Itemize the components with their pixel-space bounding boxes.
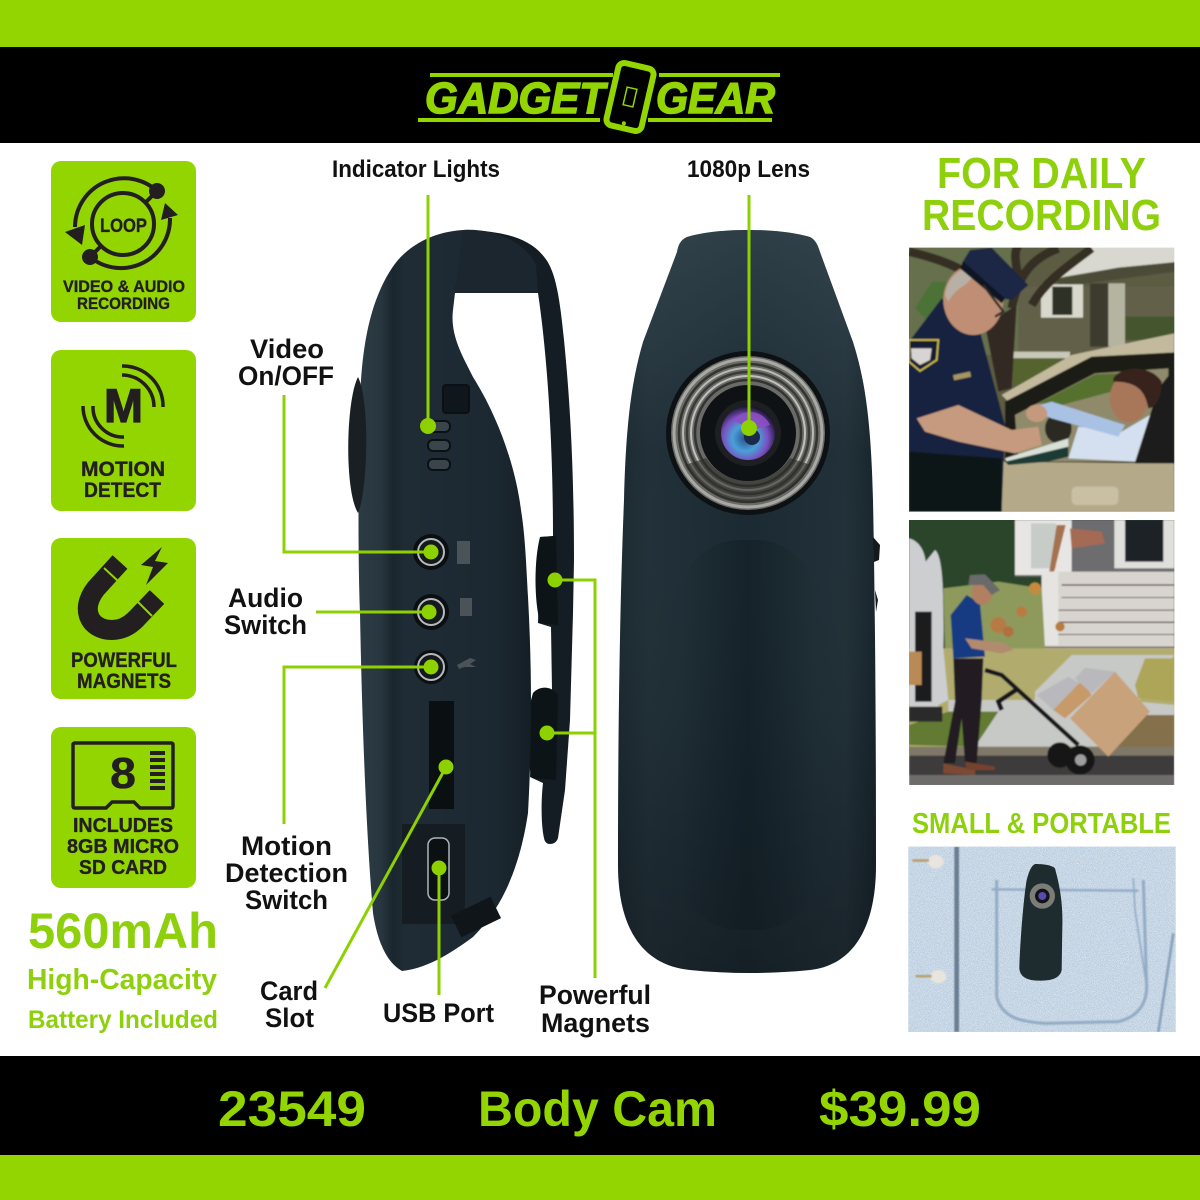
photo: delivery man with hand truck xyxy=(905,515,1180,786)
battery callout: High-Capacity xyxy=(27,964,217,996)
logo: Gadget Gear: GEAR xyxy=(656,74,775,123)
bottom green band xyxy=(0,1155,1200,1200)
panel: powerful magnets: POWERFUL xyxy=(71,649,177,672)
heading: for daily recording: RECORDING xyxy=(922,191,1161,240)
heading: small and portable: SMALL & PORTABLE xyxy=(912,808,1171,840)
logo: Gadget Gear: GADGET xyxy=(425,74,608,123)
callout: USB Port xyxy=(383,860,494,1028)
callout: Powerful Magnets xyxy=(539,572,651,1038)
switches xyxy=(413,534,449,684)
callout: Motion Detection Switch xyxy=(225,660,438,915)
panel: loop recording: VIDEO & AUDIO xyxy=(63,277,185,296)
callout: Video On/OFF: On/OFF xyxy=(238,361,334,391)
callout: Audio Switch: Switch xyxy=(224,610,307,640)
icon: horseshoe magnet xyxy=(88,547,168,630)
panel: 8GB micro SD card xyxy=(51,727,196,888)
indicator slots xyxy=(428,385,469,470)
photo: camera clipped on denim pocket xyxy=(905,843,1180,1037)
card slot xyxy=(429,701,454,809)
camera body xyxy=(358,230,531,971)
panel: loop recording: LOOP xyxy=(100,216,147,237)
icon: motion M with waves: M xyxy=(104,379,143,432)
callout: Audio Switch xyxy=(224,583,436,640)
callout: Card Slot: Slot xyxy=(265,1003,314,1033)
callout: Powerful Magnets: Magnets xyxy=(541,1008,650,1038)
callout: Video On/OFF xyxy=(238,334,438,560)
camera side view xyxy=(348,230,574,971)
photo: police officer at car window xyxy=(905,245,1180,515)
footer: product name: Body Cam xyxy=(478,1081,717,1137)
bottom black bar xyxy=(0,1056,1200,1155)
panel: motion detect: DETECT xyxy=(84,479,161,502)
side buttons xyxy=(873,537,880,612)
footer: item number: 23549 xyxy=(218,1081,366,1137)
callout: Indicator Lights: Indicator Lights xyxy=(332,156,500,183)
callout: 1080p Lens xyxy=(687,156,810,436)
panel: powerful magnets xyxy=(51,538,196,699)
center shadow xyxy=(680,540,816,930)
callout: Audio Switch: Audio xyxy=(228,583,303,613)
callout: Powerful Magnets: Powerful xyxy=(539,980,651,1010)
callout: 1080p Lens: 1080p Lens xyxy=(687,156,810,183)
icon: motion M with waves xyxy=(83,366,163,446)
battery callout: Battery Included xyxy=(28,1006,218,1034)
panel: loop recording xyxy=(51,161,196,322)
clip of camera xyxy=(450,230,574,844)
callout: USB Port: USB Port xyxy=(383,998,494,1028)
panel: 8GB micro SD card: INCLUDES xyxy=(73,815,173,837)
icon: loop arrows xyxy=(65,178,178,268)
battery callout xyxy=(27,903,218,1034)
icon: micro SD card: 8 xyxy=(110,749,136,798)
magnet pads xyxy=(527,536,558,780)
icon: micro SD card xyxy=(73,743,173,808)
panel: motion detect xyxy=(51,350,196,511)
battery callout: 560mAh xyxy=(28,903,218,959)
callout: Motion Detection Switch: Motion xyxy=(241,831,332,861)
camera front view xyxy=(618,230,880,973)
logo: Gadget Gear xyxy=(418,62,780,132)
lens assembly xyxy=(666,351,830,515)
switch icons xyxy=(457,541,476,669)
panel: loop recording: RECORDING xyxy=(77,294,170,313)
callout: Video On/OFF: Video xyxy=(250,334,324,364)
heading: for daily recording xyxy=(922,149,1161,240)
heading: for daily recording: FOR DAILY xyxy=(937,149,1146,198)
panel: motion detect: MOTION xyxy=(81,458,165,481)
panel: powerful magnets: MAGNETS xyxy=(77,670,171,693)
usb port recess xyxy=(402,824,501,937)
callout: Indicator Lights xyxy=(332,156,500,434)
footer: price: $39.99 xyxy=(819,1081,981,1137)
callout: Motion Detection Switch: Detection xyxy=(225,858,348,888)
header black bar xyxy=(0,47,1200,143)
side view lens bump xyxy=(348,377,366,513)
top green band xyxy=(0,0,1200,47)
callout: Card Slot: Card xyxy=(260,976,318,1006)
callout: Card Slot xyxy=(260,760,454,1033)
callout: Motion Detection Switch: Switch xyxy=(245,885,328,915)
panel: 8GB micro SD card: 8GB MICRO xyxy=(67,836,179,858)
panel: 8GB micro SD card: SD CARD xyxy=(79,857,167,879)
